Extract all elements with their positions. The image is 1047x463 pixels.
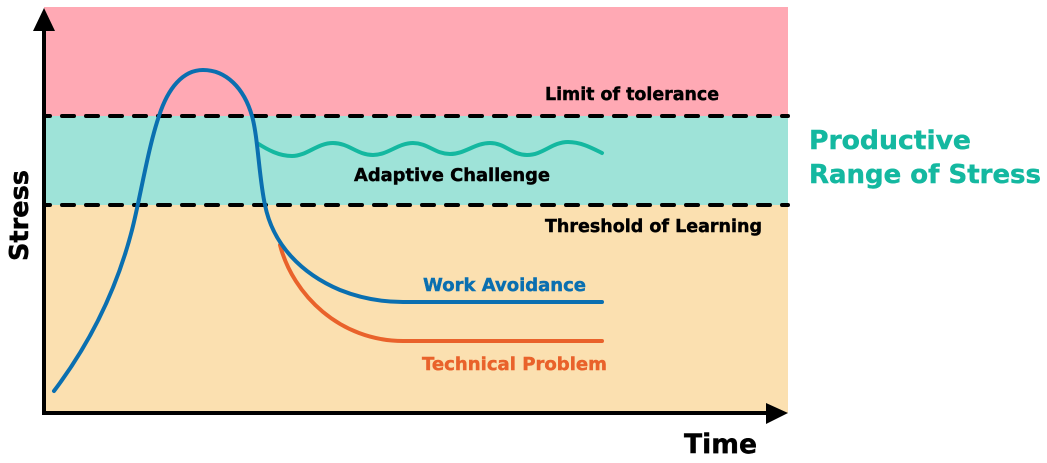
threshold of learning dashed line — [46, 203, 788, 207]
panel: below threshold of learning zone — [44, 205, 788, 413]
limit of tolerance label: Limit of tolerance — [545, 84, 719, 105]
x axis with arrow — [42, 403, 788, 424]
adaptive challenge label: Adaptive Challenge — [354, 165, 550, 186]
threshold of learning label: Threshold of Learning — [545, 216, 762, 237]
x axis label: Time — [684, 429, 757, 460]
technical problem label: Technical Problem — [422, 354, 607, 375]
work avoidance label: Work Avoidance — [423, 275, 586, 296]
productive range of stress heading: Productive — [809, 126, 971, 156]
panel: above limit of tolerance zone — [44, 7, 788, 116]
technical problem orange curve — [280, 245, 602, 341]
y axis with arrow — [33, 8, 55, 415]
y axis label: Stress — [5, 170, 35, 261]
panel: productive range zone — [44, 116, 788, 205]
work avoidance blue stress curve — [54, 70, 602, 391]
productive range of stress heading: Range of Stress — [809, 160, 1041, 190]
productive range of stress heading — [809, 126, 1041, 190]
adaptive challenge wave line — [257, 142, 602, 156]
limit of tolerance dashed line — [46, 114, 788, 118]
